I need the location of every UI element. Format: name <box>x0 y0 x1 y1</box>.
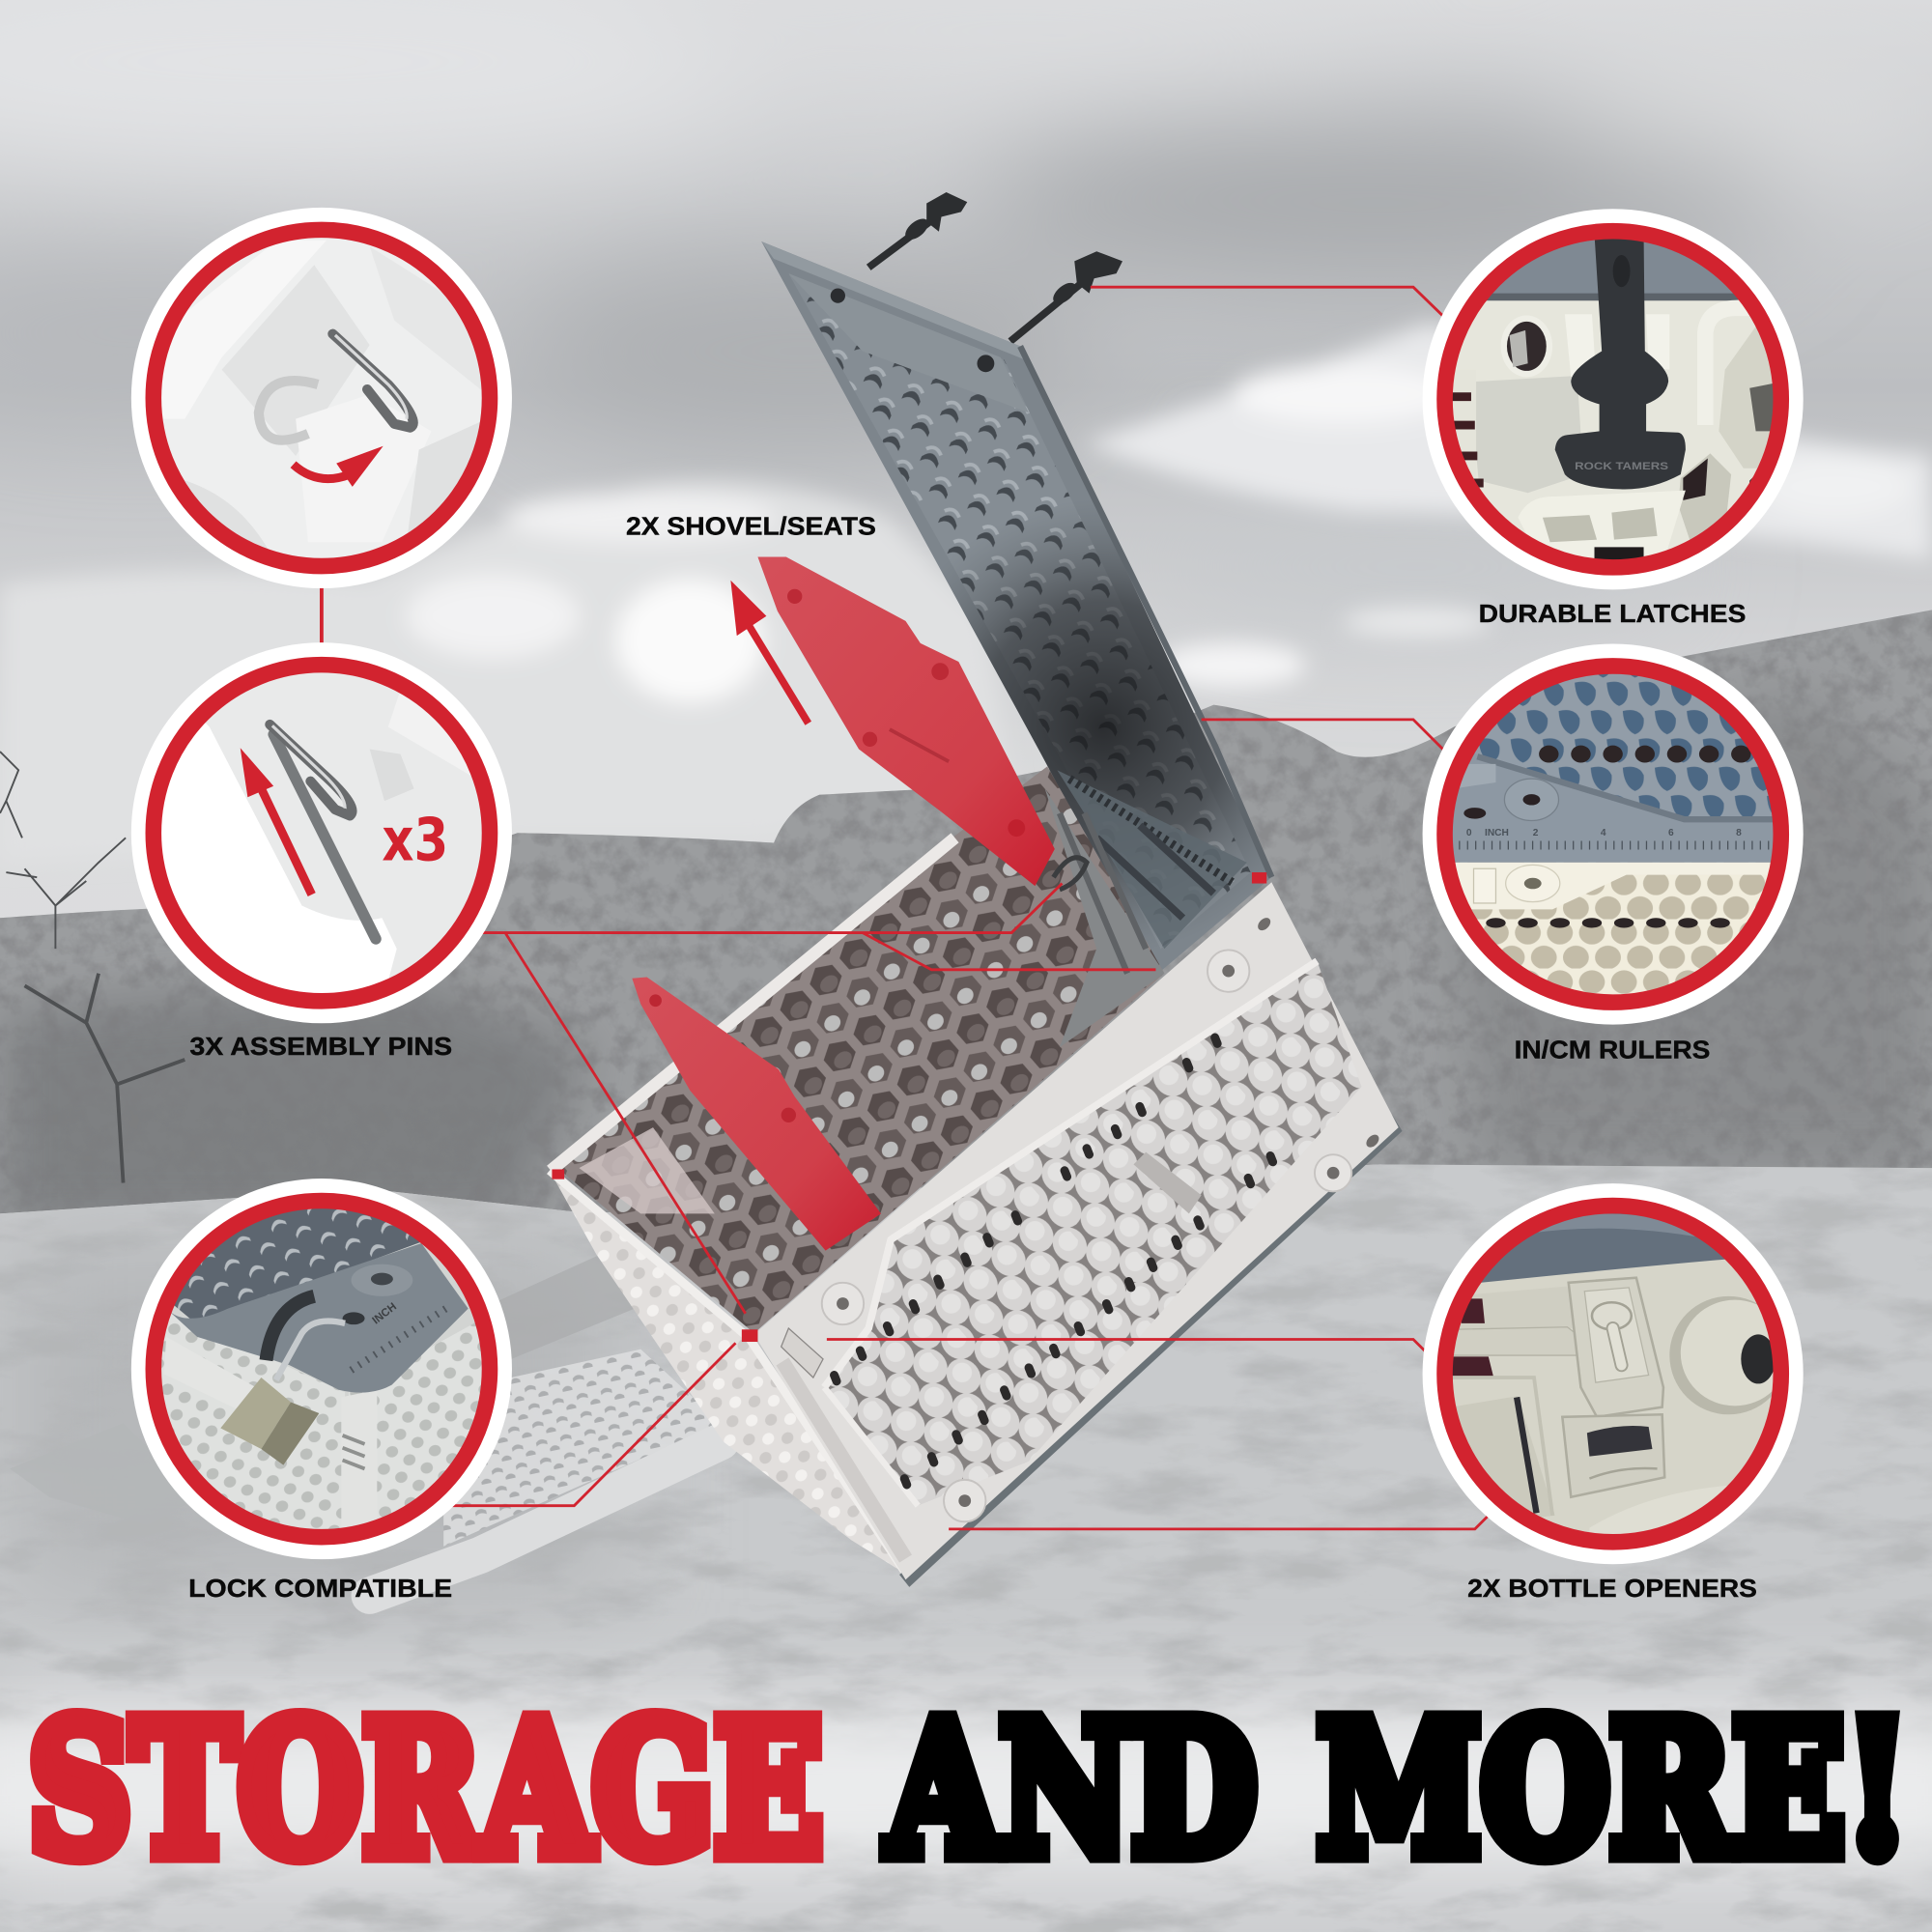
callout: ruler detail: 0 <box>1466 828 1472 838</box>
crate interior <box>551 766 1164 1333</box>
product: open storage crate <box>550 192 1403 1587</box>
lid mesh <box>160 1202 431 1324</box>
red shovel panel lower <box>632 977 881 1251</box>
open lid <box>761 242 1271 974</box>
mounting bosses <box>822 950 1351 1521</box>
callout: ruler detail: 2 <box>1533 828 1539 838</box>
lid frame <box>166 1243 469 1393</box>
callout: durable latch detail: ROCK TAMERS <box>1575 461 1668 472</box>
label: lock compatible: LOCK COMPATIBLE <box>188 1576 452 1603</box>
label: rulers: IN/CM RULERS <box>1515 1037 1710 1065</box>
latch straps on lid <box>868 192 1122 341</box>
hinge pin <box>1054 858 1087 890</box>
ghost mats on ground <box>10 1423 197 1525</box>
lower clip <box>1562 1414 1664 1497</box>
right wall <box>349 1323 481 1519</box>
opener strap <box>1452 1327 1578 1355</box>
callout: ruler detail: INCH <box>1485 828 1509 838</box>
callout: pin rotate detail <box>131 208 512 588</box>
emblem <box>1133 1152 1202 1213</box>
title: storage and more <box>28 1682 1910 1896</box>
crate front panel <box>742 882 1403 1587</box>
icon: curved rotate arrow <box>294 446 384 487</box>
red shovel panel upper <box>757 557 1055 886</box>
connector lines <box>322 287 1498 1529</box>
vent holes <box>835 1037 1273 1485</box>
title: storage and more: STORAGE <box>28 1682 823 1896</box>
label: durable latches: DURABLE LATCHES <box>1479 601 1746 628</box>
callout: ruler detail: 8 <box>1736 828 1742 838</box>
callout: bottle opener detail <box>1423 1183 1804 1564</box>
shackle <box>267 1296 314 1360</box>
callout: ruler detail: 4 <box>1601 828 1606 838</box>
callout: assembly pin detail <box>131 642 512 1023</box>
callout: padlock detail <box>131 1179 512 1559</box>
latch strap <box>1555 234 1686 489</box>
icon: up arrow <box>241 748 312 895</box>
callout: padlock detail: INCH <box>370 1301 399 1327</box>
dead tree <box>0 752 185 1182</box>
label: bottle openers: 2X BOTTLE OPENERS <box>1467 1576 1757 1603</box>
callout: durable latch detail <box>1423 209 1804 589</box>
opener plate <box>1569 1278 1663 1417</box>
callout: ruler detail: 6 <box>1668 828 1674 838</box>
text: x3: x3 <box>382 806 448 874</box>
left wall <box>161 1314 345 1529</box>
crate end face <box>550 1169 907 1575</box>
title: storage and more: AND <box>886 1682 1257 1896</box>
label: assembly pins: 3X ASSEMBLY PINS <box>189 1034 452 1061</box>
padlock body <box>220 1378 291 1449</box>
ground <box>0 1158 1932 1932</box>
label: shovel seats: 2X SHOVEL/SEATS <box>626 514 876 541</box>
mountains <box>0 604 1932 1233</box>
arrow: shovel lift <box>730 581 809 724</box>
callout: ruler detail <box>1423 643 1804 1025</box>
